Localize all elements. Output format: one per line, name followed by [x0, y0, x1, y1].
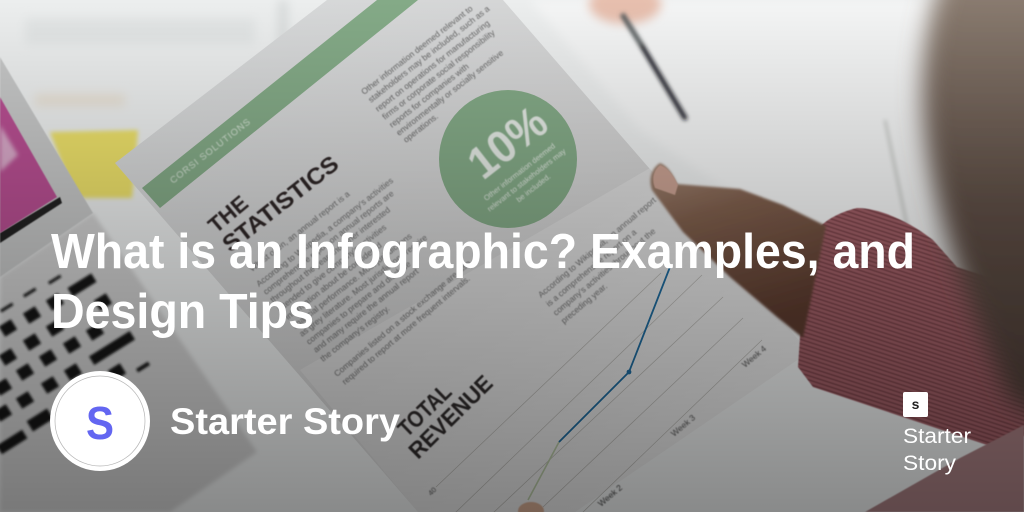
report paper: [115, 0, 809, 512]
hand at top: [589, 0, 661, 24]
paragraph: other information: stakeholders may be included, such as a: [366, 3, 492, 105]
line chart: [426, 267, 768, 512]
paragraph: annual report: information about be considered: [283, 240, 384, 322]
blurred document top left: [25, 0, 288, 106]
inner ring: [55, 376, 145, 466]
brand letter: s: [912, 396, 920, 412]
paragraph: annual report: Companies listed on a stock exchange are also: [332, 258, 473, 379]
person at right: [650, 0, 1024, 512]
white disc: [50, 371, 150, 471]
heading: the statistics: STATISTICS: [217, 150, 343, 257]
green circle: [439, 90, 577, 228]
pen tip section: [642, 46, 685, 118]
paragraph: annual report: comprehensive report on annual reports are: [261, 188, 396, 297]
head: [922, 0, 1024, 440]
paragraph: annual report: intended to give company's activities: [275, 222, 388, 314]
hand: [650, 163, 826, 338]
title: Design Tips: [51, 285, 314, 339]
laptop: [0, 57, 257, 512]
letter S: S: [86, 397, 114, 449]
paragraph: annual report: financial performance. Most jurisdictions: [290, 231, 414, 331]
lower page tone: [300, 168, 809, 512]
white paper top right: [530, 0, 930, 260]
green header band: [142, 0, 418, 208]
paper sheet: [115, 0, 809, 512]
brand name line 1: Starter: [903, 424, 971, 448]
paragraph: according to wikipedia: preceding year.: [559, 281, 609, 326]
title: What is an Infographic? Examples, and: [51, 225, 915, 279]
author name: Starter Story: [170, 401, 400, 442]
pen: [622, 14, 685, 118]
blue series line: [559, 267, 670, 442]
laptop hinge: [0, 197, 62, 243]
axis label week 2: Week 2: [596, 482, 624, 509]
shoulder: [865, 425, 1024, 512]
keyboard keys: [0, 273, 150, 454]
circle caption: relevant to stakeholders may: [485, 146, 568, 213]
paragraph: according to wikipedia: company's activities throughout the: [551, 226, 658, 318]
paragraph: other information: firms or corporate social responsibility: [380, 27, 497, 122]
paragraph: annual report: According to Wikipedia, a company's activities: [254, 175, 395, 289]
paragraph: other information: operations.: [401, 111, 440, 145]
paragraph: according to wikipedia: According to Wikipedia, an annual report: [536, 194, 658, 300]
paragraph: annual report: and many require the annual report: [311, 266, 421, 355]
paragraph: other information: [359, 3, 505, 145]
fingertip at bottom: [518, 502, 544, 512]
paragraph: annual report: as grey literature. Most jurisdictions require: [297, 232, 429, 339]
green series line: [528, 442, 559, 500]
heading: the statistics: THE: [203, 190, 253, 238]
big percent: 10%: [458, 96, 557, 189]
data point: [627, 370, 631, 374]
axis label 40: 40: [426, 485, 438, 497]
sweater sleeve: [798, 208, 1024, 447]
paper crease: [885, 120, 910, 240]
callout circle: 10%: [439, 90, 577, 228]
yellow sticky note: [50, 130, 138, 198]
laptop screen: [0, 97, 57, 233]
paragraph: annual report: [247, 175, 473, 387]
band label: CORSI SOLUTIONS: [168, 116, 253, 186]
circle caption: be included.: [515, 172, 552, 204]
heading: total revenue: TOTAL: [392, 378, 457, 442]
laptop base: [0, 213, 257, 512]
paragraph: other information: Other information deemed relevant to: [359, 3, 475, 97]
paragraph: according to wikipedia: is a comprehensive report on a: [544, 227, 639, 309]
paragraph: annual report: the company's registry.: [318, 303, 391, 364]
axis label week 3: Week 3: [669, 412, 697, 439]
brand mark: [903, 392, 971, 475]
author logo: [50, 371, 150, 471]
paragraph: other information: report on operations for manufacturing: [373, 18, 492, 114]
heading: total revenue: REVENUE: [403, 370, 498, 464]
paragraph: annual report: required to report at more frequent intervals.: [340, 274, 472, 387]
paragraph: other information: environmentally or socially sensitive: [394, 48, 505, 138]
laptop bezel: [0, 57, 93, 277]
brand square: [903, 392, 928, 417]
screen content: [0, 125, 18, 172]
paragraph: annual report: Whilst often, an annual report is a: [247, 189, 352, 274]
brand name line 2: Story: [903, 451, 956, 475]
circle caption: Other information deemed: [482, 141, 557, 203]
title: [51, 225, 915, 339]
paragraph: other information: reports for companies with: [387, 61, 471, 130]
thumbnail: [653, 165, 678, 195]
paragraph: annual report: companies to prepare and disclose: [304, 259, 413, 347]
chart grid lines: [436, 273, 762, 512]
paragraph: annual report: throughout the year and other interested: [268, 204, 392, 305]
pen barrel: [622, 14, 642, 46]
axis label week 4: Week 4: [740, 343, 768, 370]
